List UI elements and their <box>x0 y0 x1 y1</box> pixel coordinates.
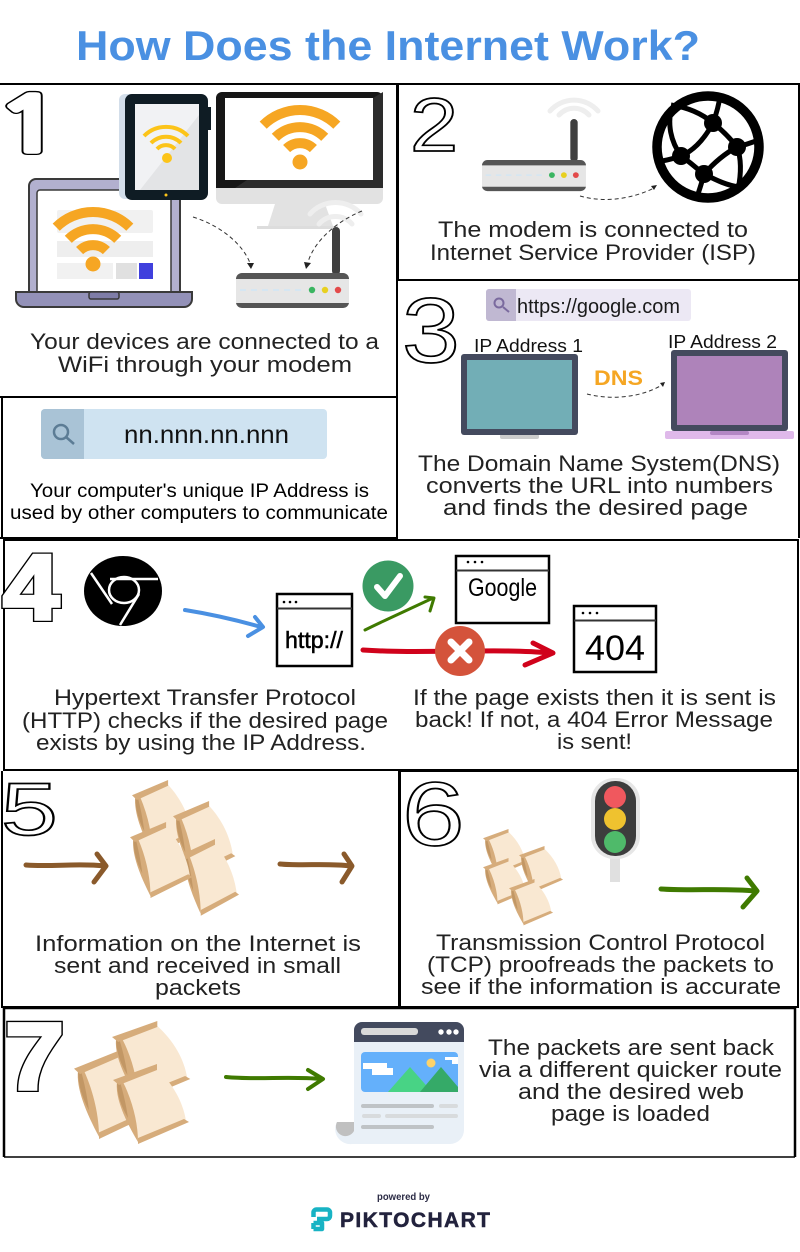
search bar: URL <box>486 289 691 321</box>
panel: step 5 packets <box>1 768 399 1007</box>
caption <box>430 217 756 265</box>
arrow: green <box>226 1070 323 1089</box>
caption: converts the URL into numbers <box>426 473 773 498</box>
panel: step 7 page loaded <box>4 1004 795 1157</box>
number 4: 4 <box>3 536 60 639</box>
number 7: 7 <box>5 1004 64 1110</box>
caption: and the desired web <box>518 1079 744 1104</box>
caption: result <box>413 685 776 754</box>
caption: HTTP check: (HTTP) checks if the desired page <box>22 708 388 733</box>
panel: step 2 modem to ISP <box>398 83 800 280</box>
caption <box>30 329 380 377</box>
caption <box>35 931 361 1000</box>
arrow: green <box>365 597 434 630</box>
panel: step 3 DNS <box>0 279 799 538</box>
arrow: DNS lookup <box>587 382 665 397</box>
icon: Google window <box>456 556 549 623</box>
caption: sent and received in small <box>54 953 341 978</box>
icon: green check <box>362 560 414 612</box>
number 7: 7 <box>5 1004 64 1110</box>
number 6: 6 <box>402 764 465 864</box>
search bar: IP address <box>41 409 327 459</box>
icon: packets <box>483 829 563 925</box>
footer: Piktochart logo <box>314 1192 490 1232</box>
caption: Information on the Internet is <box>35 931 361 956</box>
panel: step 4 HTTP <box>3 536 798 770</box>
icon: globe network <box>657 96 759 198</box>
caption: The Domain Name System(DNS) <box>418 451 780 476</box>
caption: used by other computers to communicate <box>10 502 388 524</box>
caption: Your computer's unique IP Address is <box>30 480 369 502</box>
caption: see if the information is accurate <box>421 974 781 999</box>
caption: Transmission Control Protocol <box>436 930 765 955</box>
title: How Does the Internet Work? <box>76 22 700 69</box>
caption: The modem is connected to <box>438 217 748 242</box>
arrow: brown left <box>26 854 106 882</box>
number 4: 4 <box>3 536 60 639</box>
label: IP Address 2: IP Address 2 <box>668 332 777 352</box>
caption: Your devices are connected to a <box>30 329 380 354</box>
icon: web page <box>335 1022 464 1144</box>
caption <box>418 451 780 520</box>
caption: page is loaded <box>551 1101 710 1126</box>
search bar: IP address: nn.nnn.nn.nnn <box>124 421 289 449</box>
icon: http window <box>277 594 352 666</box>
caption: (TCP) proofreads the packets to <box>427 952 774 977</box>
arrow: blue <box>185 610 263 636</box>
panel: step 1 devices <box>0 84 397 397</box>
arrow: green <box>661 878 757 907</box>
caption: result: is sent! <box>557 729 632 754</box>
arrow: monitor to modem <box>304 211 362 269</box>
icon: laptop <box>16 179 192 307</box>
icon: traffic light <box>591 778 640 882</box>
icon: packets <box>74 1021 190 1144</box>
caption: HTTP check <box>22 685 388 755</box>
footer: Piktochart logo: powered by <box>377 1192 430 1203</box>
icon: monitor teal <box>461 354 578 439</box>
icon: http window: http:// <box>285 627 344 653</box>
number 3: 3 <box>402 279 460 382</box>
icon: chrome logo <box>84 556 162 626</box>
icon: 404 window <box>574 606 656 672</box>
icon: laptop purple <box>665 350 794 439</box>
arrow: red <box>363 643 553 665</box>
caption: HTTP check: Hypertext Transfer Protocol <box>54 685 356 710</box>
label: IP Address 1: IP Address 1 <box>474 336 583 356</box>
caption <box>10 480 388 524</box>
search bar: URL: https://google.com <box>517 296 680 318</box>
icon: modem <box>482 100 598 191</box>
caption: The packets are sent back <box>488 1035 775 1060</box>
arrow: brown right <box>280 854 352 882</box>
arrow: modem to globe <box>580 185 657 199</box>
footer: Piktochart logo: PIKTOCHART <box>340 1209 490 1232</box>
number 5: 5 <box>1 768 58 851</box>
caption: HTTP check: exists by using the IP Address. <box>36 730 366 755</box>
icon: tablet <box>119 94 211 200</box>
panel: IP address <box>2 398 388 538</box>
caption: Internet Service Provider (ISP) <box>430 240 756 265</box>
icon: packets <box>130 780 239 916</box>
caption <box>421 930 781 999</box>
caption: via a different quicker route <box>479 1057 782 1082</box>
icon: red cross <box>435 626 485 676</box>
caption <box>479 1035 782 1126</box>
caption: packets <box>155 975 241 1000</box>
icon: Google window: Google <box>468 574 537 602</box>
number 2: 2 <box>410 83 458 168</box>
icon: desktop monitor <box>216 92 383 229</box>
arrow: laptop to modem <box>193 217 254 269</box>
icon: 404 window: 404 <box>585 629 645 668</box>
caption: result: back! If not, a 404 Error Message <box>415 707 773 732</box>
caption: WiFi through your modem <box>58 352 352 377</box>
label: DNS: DNS <box>594 367 643 390</box>
caption: result: If the page exists then it is sent is <box>413 685 776 710</box>
caption: and finds the desired page <box>443 495 748 520</box>
panel: step 6 TCP <box>400 764 798 1007</box>
icon: modem <box>236 202 361 308</box>
